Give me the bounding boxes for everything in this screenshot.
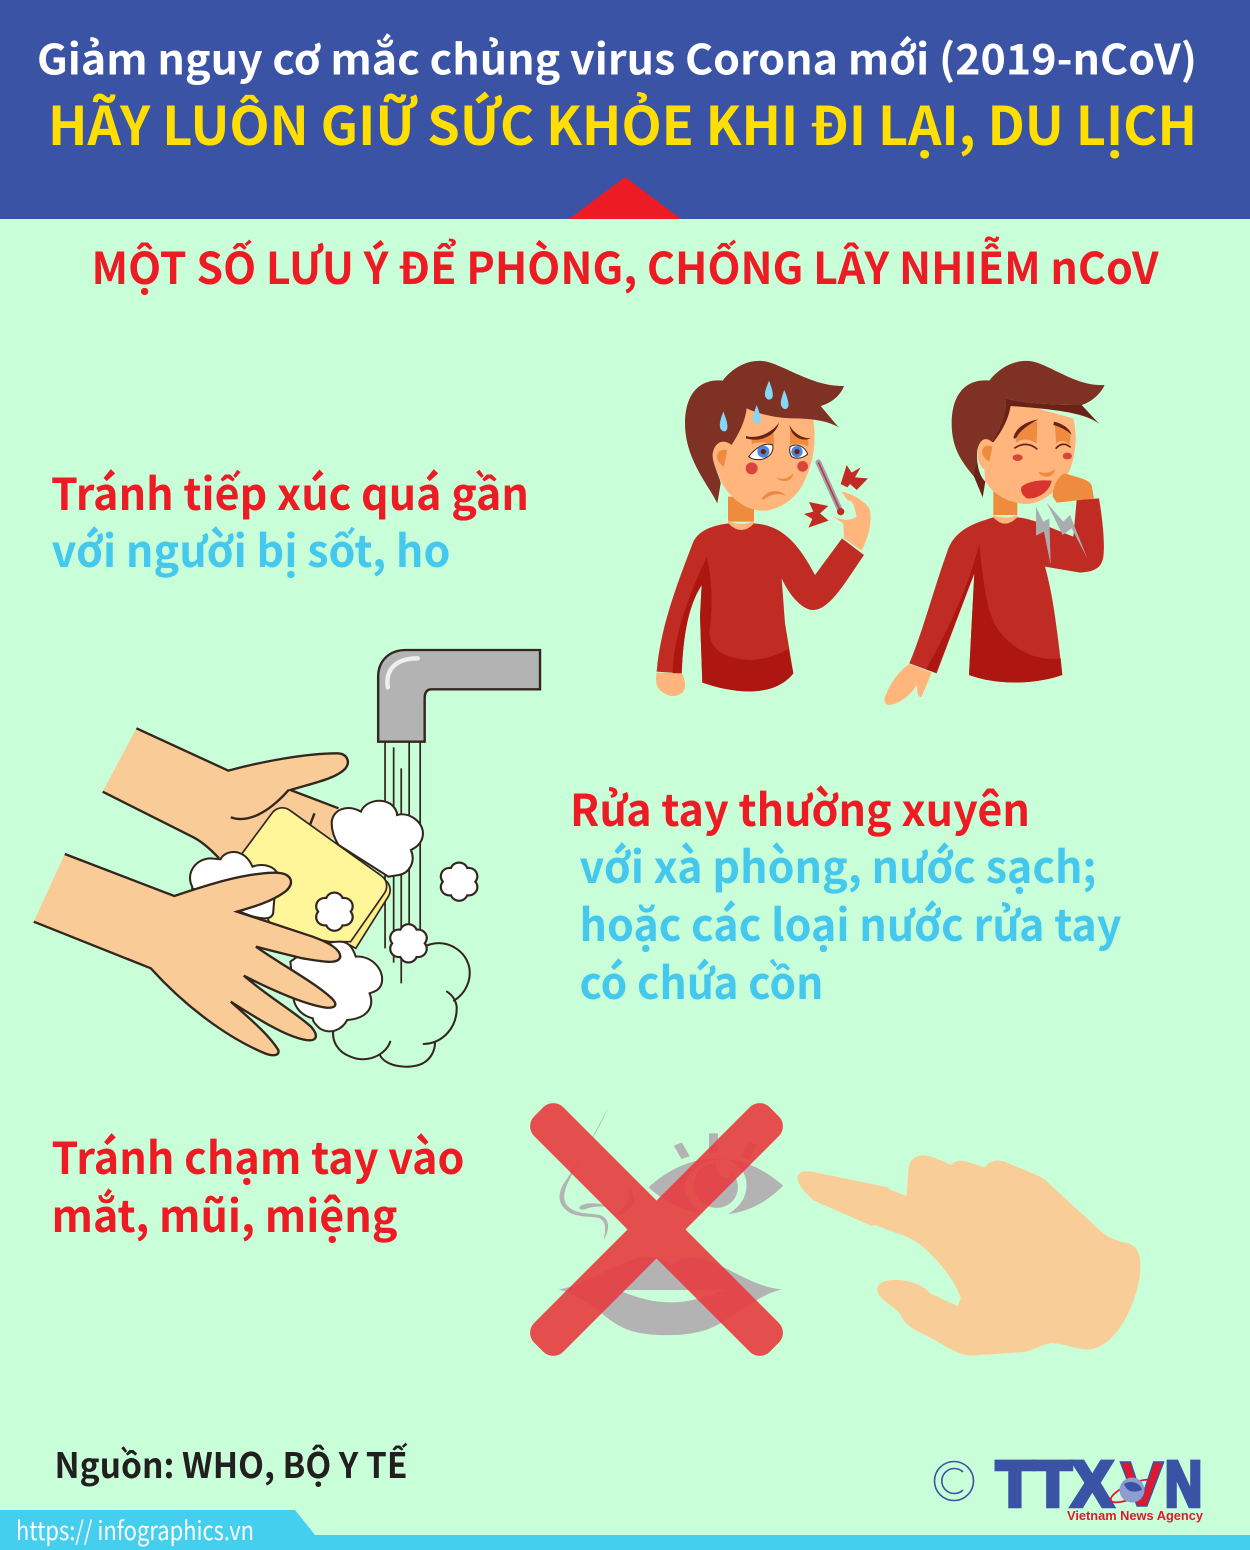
water streams [385,743,420,983]
text: wash hands: hoặc các loại nước rửa tay [580,890,1122,954]
front hand [34,854,340,1055]
text: avoid close contact [51,459,529,580]
source: Nguồn: WHO, BỘ Y TẾ [54,1438,408,1489]
icon: copyright mark [934,1462,974,1500]
header band [0,0,1250,219]
icon: mouth [559,1256,782,1335]
icon: red cross [524,1097,789,1362]
illustration: coughing boy [884,361,1105,705]
text: wash hands: với xà phòng, nước sạch; [580,832,1096,896]
icon: nose [560,1107,634,1240]
logo: TTXVN [996,1448,1204,1523]
illustration: eye, nose, mouth crossed out [524,1097,1140,1362]
faucet [378,650,540,742]
red triangle pointer [569,177,681,219]
footer band with url tab [0,1510,1250,1550]
text: avoid close contact: Tránh tiếp xúc quá gần [51,459,529,523]
icon: pointing hand [798,1155,1140,1356]
illustration: washing hands with soap under faucet [34,650,540,1067]
title line 2: HÃY LUÔN GIỮ SỨC KHỎE KHI ĐI LẠI, DU LỊCH [48,85,1197,161]
illustration: feverish boy [656,361,871,696]
footer band with url tab: https:// infographics.vn [16,1511,254,1548]
small foam bubbles [441,863,477,901]
logo: TTXVN: V [1120,1448,1164,1520]
text: wash hands [570,775,1122,1012]
logo: TTXVN: Vietnam News Agency [1067,1508,1204,1523]
icon: eye [649,1133,783,1214]
logo: TTXVN: N [1165,1448,1202,1520]
title line 1: Giảm nguy cơ mắc chủng virus Corona mới (2019-nCoV) [37,26,1197,88]
section heading: MỘT SỐ LƯU Ý ĐỂ PHÒNG, CHỐNG LÂY NHIỄM nCoV [92,233,1159,297]
soap bar [344,873,390,948]
logo: TTXVN: TTX [996,1448,1113,1520]
text: avoid touching face: Tránh chạm tay vào [52,1123,464,1187]
text: avoid touching face [52,1123,464,1245]
foam on soap [332,801,423,877]
foam outline [333,943,470,1067]
text: wash hands: Rửa tay thường xuyên [570,775,1030,839]
text: avoid close contact: với người bị sốt, ho [52,516,450,580]
text: avoid touching face: mắt, mũi, miệng [52,1181,398,1245]
back hand [103,728,348,858]
text: wash hands: có chứa cồn [580,948,824,1012]
